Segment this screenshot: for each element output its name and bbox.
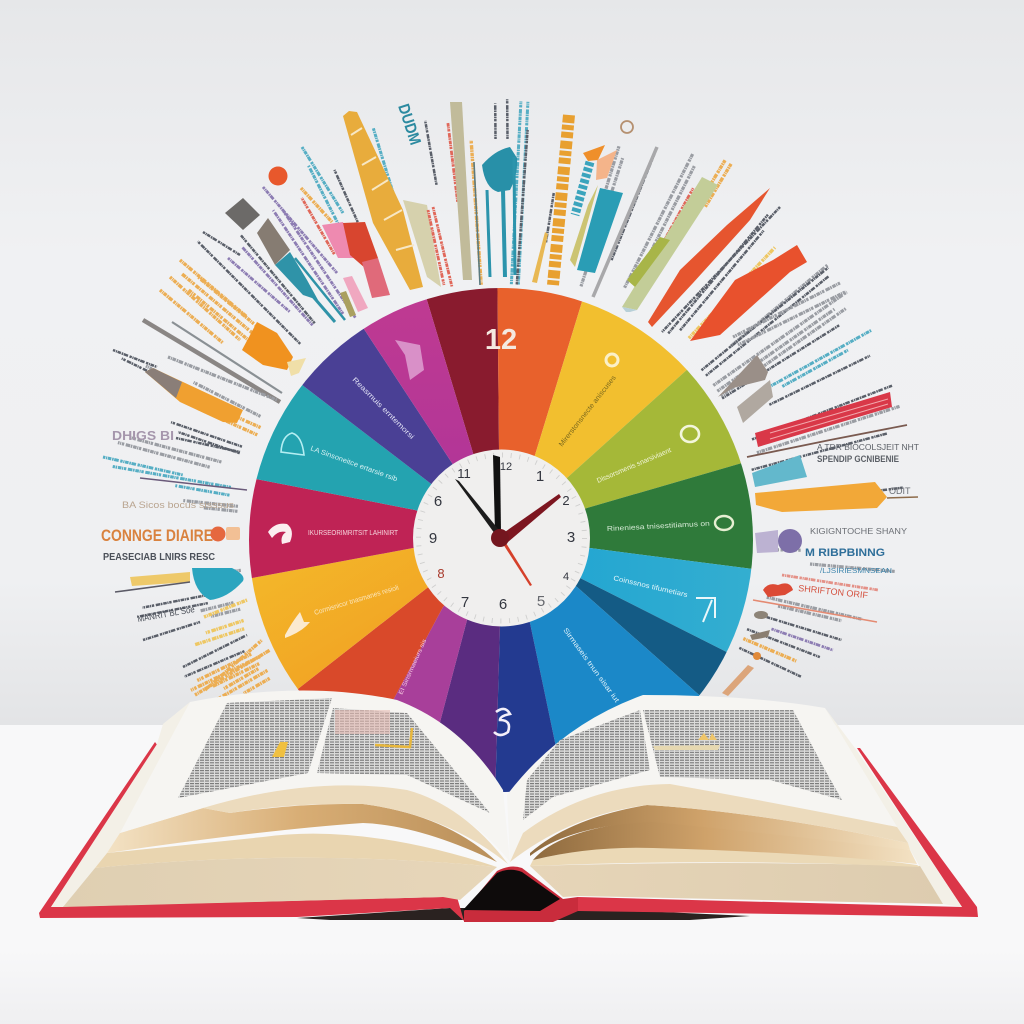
strip: left orange text rows (160, 260, 247, 343)
strip: thin yellow bar (532, 232, 548, 283)
clock numerals: 3 (567, 529, 575, 546)
label: blue wedge: Sirmaseis tnun sisar iut (561, 627, 620, 704)
strips: right fan (668, 215, 903, 677)
leaves left (95, 804, 497, 868)
page right (507, 695, 897, 862)
clock hand: minute (493, 455, 501, 532)
icon: gray objects (718, 355, 773, 423)
icon: indigo wedge mark (494, 709, 510, 735)
strip: orange pen (755, 482, 887, 512)
icon: olive wedge mark (681, 426, 699, 442)
label: cyan wedge: Coinssnos tifumetiars (613, 575, 689, 599)
text: strip line left: PEASECIAB LNIRS RESC (103, 552, 215, 563)
strip: orange dark line (747, 425, 907, 457)
icon: pink and red cluster (322, 222, 390, 317)
strip: pen tail (887, 497, 918, 498)
strip: red-brown text (428, 207, 452, 287)
clock numerals (429, 461, 575, 613)
page edge right (825, 708, 962, 907)
text block: right page outer (643, 710, 842, 800)
strip: orange lettering column (553, 115, 569, 285)
text: right label rows: M RIBPBINNG (805, 547, 885, 559)
icon: teal blob with drips (482, 147, 517, 277)
clock numerals: 2 (562, 493, 570, 508)
strips: top fan (373, 99, 731, 302)
strip: long orange band (343, 111, 423, 290)
label: green wedge: Rineniesa tnisestitiamus on (607, 521, 710, 533)
icon: cyan wedge mark (696, 598, 715, 622)
text block: right page (523, 710, 650, 820)
colour wheel (249, 288, 753, 792)
icon: orange dot (268, 166, 288, 186)
clock numerals: 7 (461, 594, 469, 611)
clock numerals: 1 (536, 468, 544, 485)
label: orange-purple wedge: EI Sinsrmaeiurs sis (398, 639, 428, 696)
text: strip label lower left: MANRIT BL Soe (137, 604, 195, 624)
page edge left (51, 702, 190, 907)
strip: teal block (577, 188, 623, 273)
strips: left and lower-left fan (111, 166, 365, 708)
text: small label left: BA Sicos bocus sisssus (122, 500, 234, 511)
text: strip heading left: CONNGE DIAIRE (101, 526, 213, 545)
icon: teal wedge mark (281, 433, 304, 455)
page right underside (510, 784, 908, 862)
strip: text rows upper left (203, 147, 343, 312)
text: right label rows: ODIT (889, 486, 911, 496)
strip: teal top lettering: DUDM (394, 102, 423, 147)
page block right (530, 863, 943, 904)
clock hand: hour (502, 494, 561, 542)
page block left (63, 858, 497, 907)
strip: dark line left (115, 582, 190, 592)
icon: green wedge mark (715, 516, 733, 530)
icon: teal brush body (275, 252, 345, 322)
icon: crimson wedge mark (268, 524, 292, 544)
icon: orange circle left (210, 526, 240, 542)
icon: lower right items (722, 611, 770, 696)
number: 12 on wheel: 12 (485, 324, 517, 356)
clock numerals: 6 (499, 596, 507, 613)
strip: red streak upper (648, 188, 770, 327)
strip: dark text diagonal (662, 207, 780, 332)
clock (413, 450, 590, 626)
text: right label rows: SHRIFTON ORIF (798, 583, 869, 600)
icon: teal bowl left (192, 568, 244, 600)
background wall (0, 0, 1024, 725)
clock numerals: 4 (563, 571, 569, 583)
clock numerals: 9 (429, 530, 437, 547)
strip: salmon text (782, 575, 878, 590)
book cover right (578, 748, 978, 917)
clock hub (491, 529, 509, 547)
radial fan of infographic strips (101, 99, 919, 708)
strip: right gray rows (733, 283, 845, 345)
leaves right (530, 805, 920, 867)
label: teal wedge: LA Sinsoneitce ertarsie rsib (309, 445, 398, 483)
icon: yellow wedge mark lower (285, 612, 310, 638)
strip: left gray streaks (113, 320, 282, 402)
label: crimson wedge: IKURSEORIMRITSIT LAHINIRT (308, 530, 399, 537)
clock numerals: 12 (500, 461, 512, 473)
page left (120, 690, 510, 862)
strip: olive sliver (570, 185, 598, 267)
label: yellow wedge: Mirerstonsnecte aniscuses (558, 374, 618, 448)
clock face (413, 450, 590, 626)
strip: teal patch (752, 455, 807, 487)
icon: purple blobs (755, 529, 802, 553)
clock hand: red thin (503, 543, 532, 586)
strip: thin dark line (474, 162, 480, 285)
label: yellow wedge lower: Cormisnicor tnasmanes resioli (314, 584, 400, 617)
icon: magenta wedge flower (395, 340, 424, 380)
strip: left orange bar (145, 368, 243, 423)
icon: brown brush (257, 218, 290, 265)
spine gap (463, 870, 560, 911)
clock numerals: 8 (437, 566, 445, 581)
page left underside (203, 785, 508, 864)
book shadow (297, 908, 750, 920)
text: right label rows: /LJSIRIESMNSEAN (820, 566, 892, 575)
text: right label rows: KIGIGNTOCHE SHANY (810, 527, 908, 536)
table surface (0, 725, 1024, 1024)
strip: olive bands (622, 177, 718, 312)
open book (39, 690, 978, 922)
strip: yellow tag left (130, 572, 190, 586)
icon: yellow wedge mark (606, 354, 618, 366)
icon: orange blobs (583, 121, 633, 180)
highlight: left page figure (272, 710, 412, 757)
icon: red blob right (763, 583, 793, 597)
icon: orange blob left (242, 322, 306, 376)
highlight: right page figure (653, 733, 720, 750)
text block: left page (178, 698, 332, 798)
text: right label rows (798, 442, 919, 600)
text: right label rows: A TDR BIOCOLSJEIT NHT (817, 442, 919, 452)
wheel labels (268, 340, 733, 735)
text block: left page inner (317, 708, 490, 813)
wheel wedges (249, 288, 753, 792)
strip: right red lines (755, 392, 892, 447)
book cover centre (464, 867, 578, 922)
clock hand: second black (455, 479, 499, 534)
text: right label rows: SPENDIP GCNIBENIE (817, 454, 899, 464)
clock numerals: 6 (434, 493, 442, 510)
strip: teal letters (575, 162, 590, 215)
strip: olive bar (450, 102, 472, 280)
icon: gray object top left (225, 198, 260, 230)
strip: left mid rows (103, 438, 270, 695)
strip: red streak lower (690, 245, 807, 341)
text: gray heading left: DHIGS BI (112, 428, 174, 443)
strip: long gray line (593, 147, 657, 297)
label: olive wedge: Dissorsmenis snarsiviaent (596, 447, 672, 485)
book cover left (39, 742, 464, 921)
strip: olive feather (403, 200, 441, 287)
label: indigo wedge: Reasmuis erntemorsi (351, 376, 415, 441)
clock numerals: 5 (537, 593, 545, 610)
strip: salmon line (753, 600, 877, 622)
clock numerals: 11 (457, 466, 471, 481)
